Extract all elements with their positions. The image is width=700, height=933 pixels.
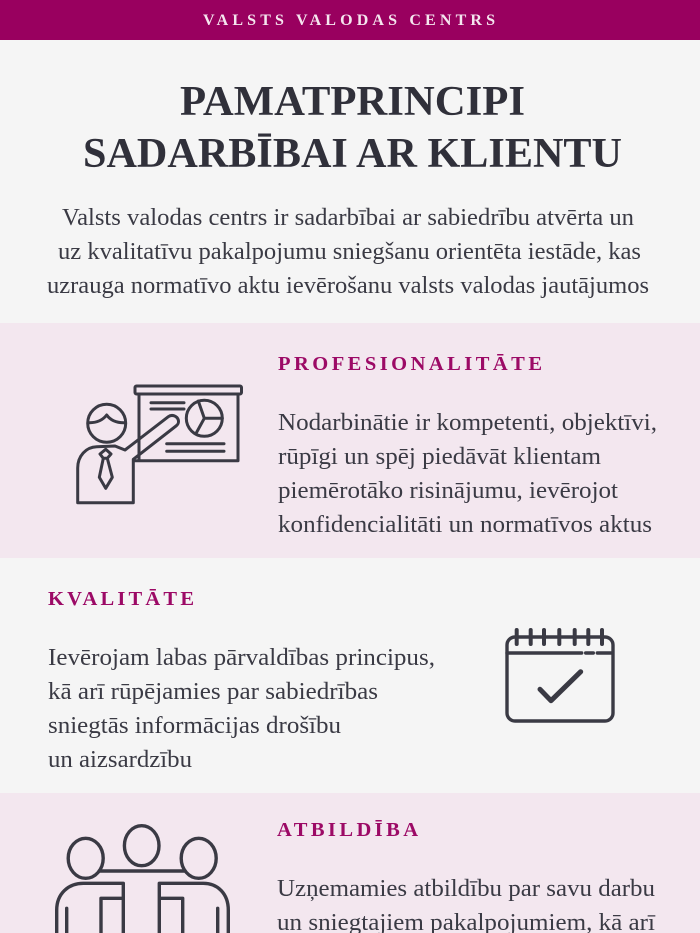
header bar <box>0 0 700 40</box>
heading: profesionalitāte: PROFESIONALITĀTE <box>278 353 542 375</box>
text: atbildība <box>277 875 656 933</box>
title: PAMATPRINCIPI <box>180 79 525 125</box>
text: kvalitāte: sniegtās informācijas drošību <box>48 712 341 739</box>
panel: atbildība <box>0 793 700 933</box>
text: kvalitāte: un aizsardzību <box>48 746 192 773</box>
panel: kvalitāte <box>0 558 700 793</box>
heading: atbildība: ATBILDĪBA <box>277 819 418 841</box>
text: profesionalitāte: konfidencialitāti un normatīvos aktus <box>278 511 652 538</box>
text: profesionalitāte <box>278 409 657 538</box>
panel: profesionalitāte <box>0 323 700 558</box>
intro text: Valsts valodas centrs ir sadarbībai ar sabiedrību atvērta un <box>62 204 634 231</box>
text: kvalitāte: kā arī rūpējamies par sabiedrības <box>48 678 378 705</box>
text: profesionalitāte: rūpīgi un spēj piedāvāt klientam <box>278 443 601 470</box>
text: profesionalitāte: Nodarbinātie ir kompetenti, objektīvi, <box>278 409 657 436</box>
text: profesionalitāte: piemērotāko risinājumu, ievērojot <box>278 477 618 504</box>
icon: presenter at board <box>78 386 242 503</box>
title <box>83 79 622 177</box>
text: atbildība: Uzņemamies atbildību par savu darbu <box>277 875 655 902</box>
intro text <box>47 204 649 299</box>
icon: group of people <box>57 826 228 933</box>
intro text: uzrauga normatīvo aktu ievērošanu valsts valodas jautājumos <box>47 272 649 299</box>
header bar: VALSTS VALODAS CENTRS <box>203 12 495 29</box>
text: kvalitāte: Ievērojam labas pārvaldības principus, <box>48 644 435 671</box>
icon: calendar with check mark <box>507 630 613 721</box>
text: kvalitāte <box>48 644 435 773</box>
heading: kvalitāte: KVALITĀTE <box>48 588 194 610</box>
intro text: uz kvalitatīvu pakalpojumu sniegšanu orientēta iestāde, kas <box>58 238 641 265</box>
title: SADARBĪBAI AR KLIENTU <box>83 131 622 177</box>
